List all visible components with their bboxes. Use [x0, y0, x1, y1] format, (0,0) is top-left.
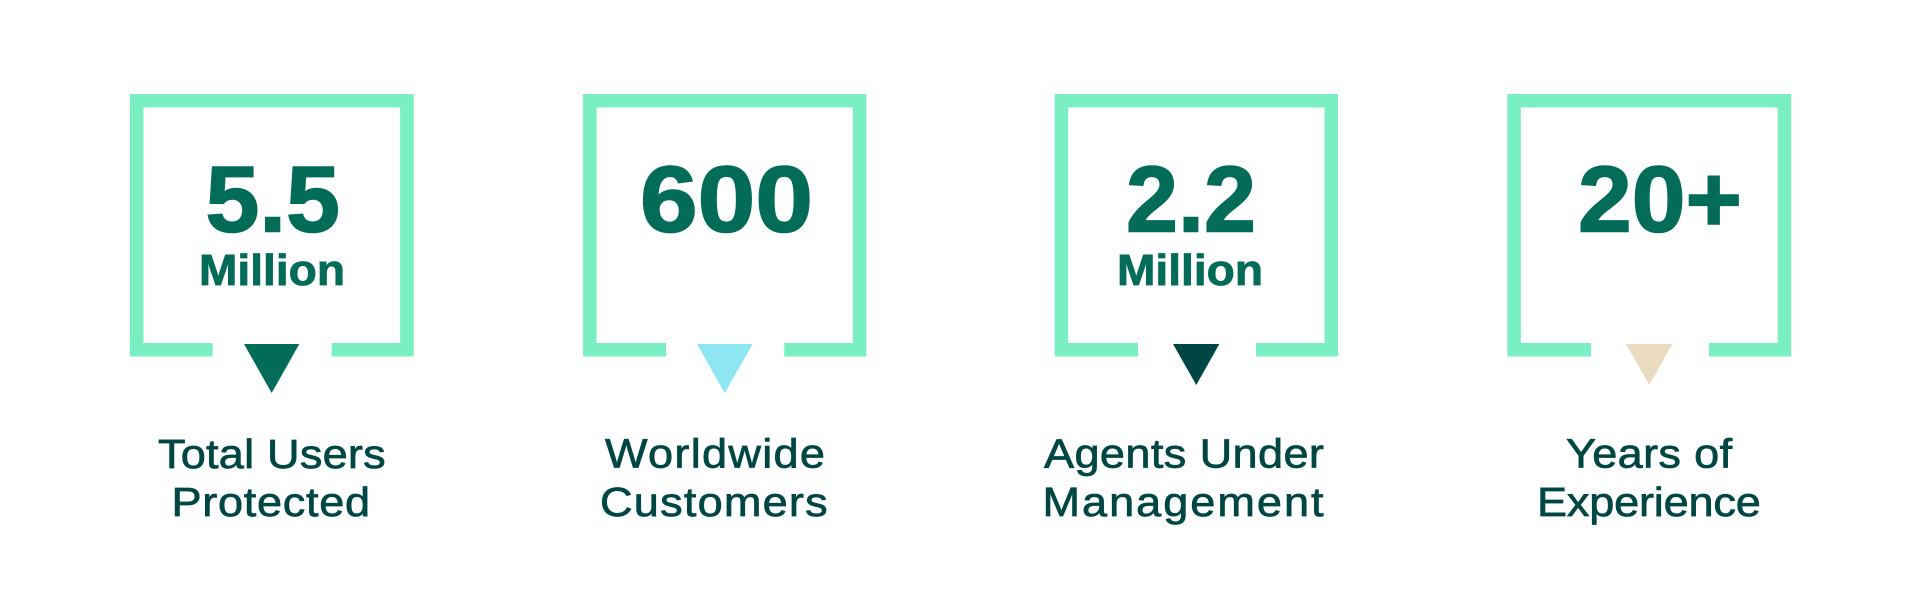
stat unit: Million: Million [199, 246, 345, 295]
panel: total users protected [137, 101, 407, 526]
frame: bracket box [590, 101, 860, 350]
icon: beige down triangle [1626, 344, 1672, 385]
panel: agents under management [1042, 101, 1331, 526]
label: Agents Under Management: Management [1042, 480, 1324, 526]
stat number: 2.2: 2.2 [1126, 146, 1256, 252]
label: Agents Under Management: Agents Under [1044, 431, 1324, 477]
label: Years of Experience: Years of [1566, 431, 1733, 477]
frame: bracket box [137, 101, 407, 350]
icon: green down triangle [244, 344, 299, 393]
frame: bracket box [1061, 101, 1331, 350]
stat number: 5.5: 5.5 [206, 146, 340, 252]
label: Agents Under Management [1042, 431, 1324, 526]
label: Total Users Protected: Protected [172, 480, 370, 526]
stat number: 20+: 20+ [1578, 146, 1742, 252]
label: Worldwide Customers: Worldwide [605, 431, 825, 477]
label: Years of Experience: Experience [1537, 480, 1761, 526]
label: Worldwide Customers [600, 431, 828, 526]
icon: dark teal down triangle [1173, 344, 1219, 385]
panel: worldwide customers [590, 101, 860, 526]
stat number: 600: 600 [640, 146, 813, 252]
panel: years of experience [1514, 101, 1784, 526]
label: Total Users Protected: Total Users [158, 432, 386, 478]
label: Years of Experience [1537, 431, 1761, 526]
label: Total Users Protected [158, 432, 386, 526]
stat unit: Million: Million [1117, 246, 1263, 295]
label: Worldwide Customers: Customers [600, 480, 828, 526]
frame: bracket box [1514, 101, 1784, 350]
icon: light blue down triangle [697, 344, 753, 393]
